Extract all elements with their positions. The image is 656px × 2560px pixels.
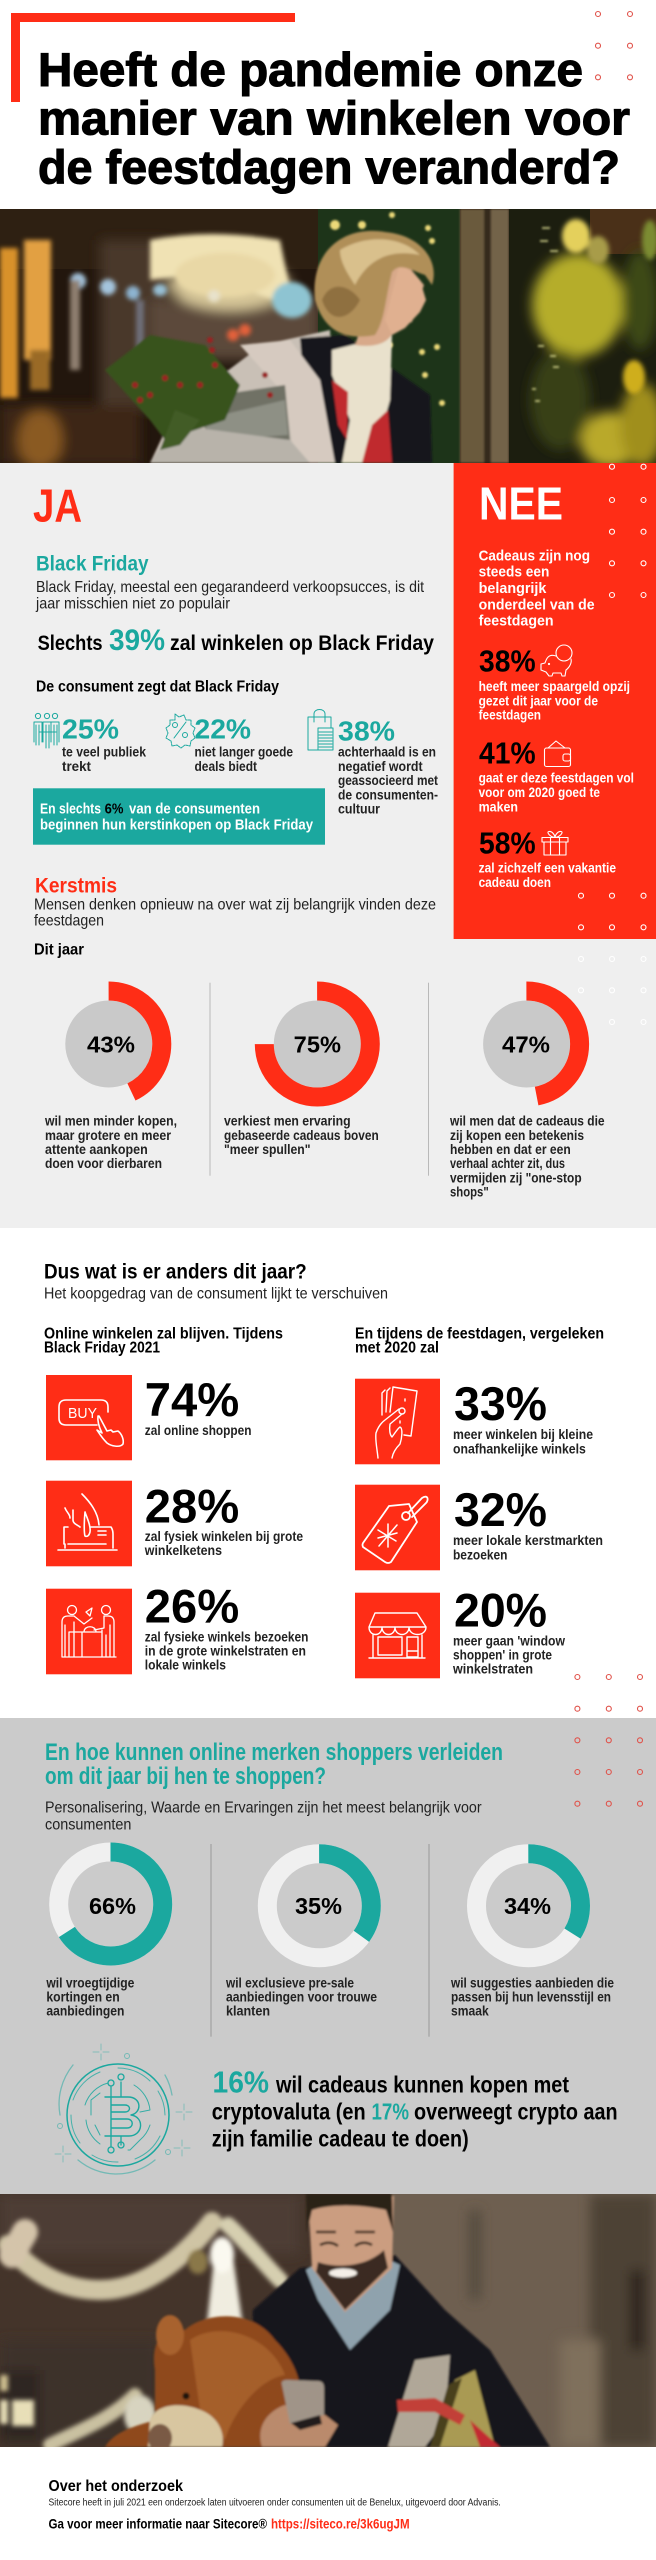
callout: 6%: van de consumenten [129,800,260,817]
stat: 33%: onafhankelijke winkels [453,1441,586,1456]
stat: 20%: winkelstraten [452,1662,533,1677]
section: over het onderzoek: Sitecore heeft in juli 2021 een onderzoek laten uitvoeren onder consumenten uit de Benelux, uitgevoerd door Advanis. [48,2498,501,2509]
Black Friday intro: Black Friday, meestal een gegarandeerd verkoopsucces, is dit [36,579,424,596]
stat 38%: gezet dit jaar voor de [479,693,598,708]
heading: om dit jaar bij hen te shoppen? [45,1763,326,1790]
caption 75%: "meer spullen" [224,1142,310,1157]
divider [428,1844,430,2037]
column heading right [355,1325,604,1357]
icon: gift [542,831,568,855]
stat: 26%: 26% [145,1580,239,1633]
photo: man with teddy bear and phone [0,2194,656,2452]
stat 38%: 38% [479,644,536,679]
caption 47% [449,1114,605,1200]
caption 43%: attente aankopen [45,1142,148,1157]
decorative dot grid top [596,12,632,80]
caption 34% [450,1975,614,2019]
call to action: https://siteco.re/3k6ugJM [271,2517,410,2532]
stat: 28%: zal fysiek winkelen bij grote [145,1529,303,1544]
caption 43%: doen voor dierbaren [45,1156,162,1171]
subheading: De consument zegt dat Black Friday [36,679,279,696]
stat 38%: negatief wordt [338,759,423,774]
stat: 26%: in de grote winkelstraten en [145,1643,306,1658]
callout: 6%: En slechts [40,800,101,817]
stat: 28%: 28% [145,1480,239,1533]
crypto statement: wil cadeaus kunnen kopen met [275,2072,569,2098]
stat 38% [479,644,630,722]
stat 58%: zal zichzelf een vakantie [479,861,616,876]
NEE intro text [479,547,595,630]
donut 66% [59,1852,163,1956]
stat 41% [479,735,634,814]
stat 22%: 22% [194,713,251,744]
stat 38%: geassocieerd met [338,773,438,788]
column heading right: En tijdens de feestdagen, vergeleken [355,1325,604,1342]
stat 41%: 41% [479,735,536,770]
heading: Dus wat is er anders dit jaar: Dus wat is er anders dit jaar? [44,1260,307,1283]
stat 58% [479,825,616,890]
stat: 32%: 32% [454,1483,547,1536]
caption 34%: smaak [451,2004,489,2019]
column heading left: Black Friday 2021 [44,1340,160,1357]
Black Friday heading: Black Friday [36,552,149,575]
stat: 74% online shoppen: zal online shoppen [145,1423,252,1438]
donut 66%: 66% [89,1893,136,1919]
stat: 33% [355,1377,593,1464]
donut 47%: 47% [502,1031,550,1057]
caption 66% [46,1975,135,2019]
caption 47%: wil men dat de cadeaus die [449,1114,605,1129]
intro: Personalisering, Waarde en Ervaringen zijn het meest belangrijk voor [45,1800,482,1817]
Kerstmis intro: Mensen denken opnieuw na over wat zij belangrijk vinden deze [34,896,436,913]
crypto statement: cryptovaluta (en [212,2099,366,2125]
divider [428,983,429,1176]
intro [45,1800,482,1833]
stat: 74% online shoppen: 74% [145,1373,239,1426]
donut 35% [267,1854,371,1958]
crypto statement [212,2065,618,2152]
heading: En hoe kunnen online merken shoppers verleiden [45,1739,503,1766]
caption 35% [225,1975,377,2019]
caption 47%: vermijden zij "one-stop [450,1170,582,1185]
callout: 6% [33,788,325,845]
stat: 32% [355,1483,603,1570]
NEE intro text: steeds een [479,564,549,581]
stat 38%: de consumenten- [338,787,438,802]
title [38,43,630,193]
caption 75%: gebaseerde cadeaus boven [224,1128,379,1143]
icon: shopping bags [308,710,333,750]
caption 66%: aanbiedingen [46,2004,124,2019]
stat 38% [308,710,438,816]
NEE intro text: Cadeaus zijn nog [479,547,590,564]
caption 47%: hebben en dat er een [450,1142,571,1157]
icon: crowd [34,713,59,748]
Kerstmis intro [34,896,436,930]
column heading left: Online winkelen zal blijven. Tijdens [44,1325,283,1342]
icon: buy button [59,1400,123,1446]
callout: 6%: beginnen hun kerstinkopen op Black Friday [40,816,314,833]
heading: JA: JA [33,480,82,532]
divider [210,1844,212,2037]
headline stat 39%: Slechts [38,631,103,655]
caption 75%: verkiest men ervaring [224,1114,351,1129]
stat 41%: maken [479,799,518,814]
headline stat 39%: zal winkelen op Black Friday [170,631,434,655]
caption 43%: wil men minder kopen, [44,1114,177,1129]
stat: 26% [46,1580,308,1674]
stat: 28% [46,1480,303,1566]
stat: 28%: winkelketens [144,1543,222,1558]
stat 25%: te veel publiek [62,745,146,760]
caption 35%: wil exclusieve pre-sale [225,1975,354,1990]
stat 25% [34,713,146,774]
crypto statement: zijn familie cadeau te doen) [212,2126,469,2152]
caption 66%: kortingen en [46,1990,120,2005]
subheading: Het koopgedrag van de consument lijkt te verschuiven [44,1285,388,1302]
crypto statement: 17% [372,2099,409,2125]
Kerstmis heading: Kerstmis [35,875,117,898]
title: Heeft de pandemie onze [38,43,583,96]
icon: cash register [58,1494,117,1550]
panel: NEE [454,463,656,1024]
icon: bitcoin circuit [55,2044,192,2174]
section: over het onderzoek [48,2478,501,2532]
caption 34%: wil suggesties aanbieden die [450,1975,614,1990]
NEE intro text: feestdagen [479,613,554,630]
headline stat 39%: 39% [109,624,165,657]
caption 35%: aanbiedingen voor trouwe [226,1990,377,2005]
stat 22%: niet langer goede [194,745,293,760]
icon: piggy bank [541,645,572,676]
title: manier van winkelen voor [38,91,630,144]
column heading right: met 2020 zal [355,1340,439,1357]
photo: woman with bouquet at shop window [0,209,656,470]
caption 34%: passen bij hun levensstijl en [451,1990,611,2005]
stat: 20%: meer gaan 'window [453,1633,565,1648]
title: de feestdagen veranderd? [38,140,620,193]
callout: 6%: 6% [105,800,123,817]
icon: shop counter [62,1606,116,1657]
NEE dots [578,464,646,1024]
woman figure [105,231,434,463]
stat 25%: 25% [62,713,119,744]
stat: 33%: 33% [454,1377,547,1430]
Kerstmis intro: feestdagen [34,913,104,930]
donut 75% [264,991,370,1097]
stat: 32%: meer lokale kerstmarkten [453,1533,603,1548]
stat 22% [166,713,293,774]
stat 38%: 38% [338,716,395,747]
NEE intro text: belangrijk [479,580,547,597]
stat 58%: cadeau doen [479,875,551,890]
stat 22%: deals biedt [194,759,257,774]
section: over het onderzoek: Over het onderzoek [48,2478,183,2495]
panel: JA [33,480,438,959]
caption 66%: wil vroegtijdige [46,1975,135,1990]
stat 41%: gaat er deze feestdagen vol [479,771,634,786]
Black Friday intro [35,579,424,612]
caption 35%: klanten [226,2004,270,2019]
donut 47% [474,991,580,1097]
stat 38%: heeft meer spaargeld opzij [479,679,630,694]
divider [210,983,211,1176]
Dit jaar label: Dit jaar [34,942,84,959]
donut 43% [56,991,162,1097]
caption 47%: zij kopen een betekenis [450,1128,584,1143]
icon: discount badge [166,714,195,748]
stat 38%: cultuur [338,801,381,816]
icon: storefront [369,1613,426,1658]
dots [575,1674,642,1806]
icon: hand with money [376,1387,417,1458]
hand, phone, gifts [260,2405,338,2447]
caption 75% [224,1114,379,1157]
icon: wallet [544,741,570,766]
caption 47%: shops" [450,1185,489,1200]
intro: consumenten [45,1816,131,1833]
panel: online merken [0,1674,656,2194]
stat 38%: feestdagen [479,707,541,722]
stat 25%: trekt [62,759,91,774]
heading [45,1739,503,1790]
panel: JA background [0,463,656,1228]
icon: buy button: BUY [68,1406,97,1422]
stat: 20%: 20% [454,1584,547,1637]
donut 75%: 75% [294,1031,341,1057]
stat: 32%: bezoeken [453,1547,508,1562]
stat 58%: 58% [479,825,536,860]
donut 43%: 43% [87,1031,135,1057]
stat: 26%: zal fysieke winkels bezoeken [145,1629,308,1644]
NEE intro text: onderdeel van de [479,596,595,613]
bear [105,2316,302,2447]
donut 35%: 35% [295,1893,342,1919]
title accent bracket [11,13,295,102]
donut 34% [476,1854,580,1958]
stat: 20% [355,1584,565,1678]
call to action: Ga voor meer informatie naar Sitecore® [48,2517,267,2532]
caption 43% [44,1114,177,1171]
stat: 74% online shoppen [46,1373,252,1460]
caption 47%: verhaal achter zit, dus [450,1156,565,1171]
caption 43%: maar grotere en meer [45,1128,172,1143]
man figure [105,2194,550,2452]
stat 41%: voor om 2020 goed te [479,785,600,800]
Black Friday intro: jaar misschien niet zo populair [35,595,231,612]
stat 38%: achterhaald is en [338,745,436,760]
icon: price tag with snowflake [362,1497,428,1563]
crypto statement: 16% [212,2065,269,2100]
donut 34%: 34% [504,1893,551,1919]
stat: 20%: shoppen' in grote [453,1648,552,1663]
stat: 26%: lokale winkels [145,1657,226,1672]
stat: 33%: meer winkelen bij kleine [453,1427,593,1442]
heading: NEE: NEE [479,477,563,529]
column heading left [44,1325,283,1357]
headline stat 39% [38,624,434,657]
crypto statement: overweegt crypto aan [414,2099,618,2125]
